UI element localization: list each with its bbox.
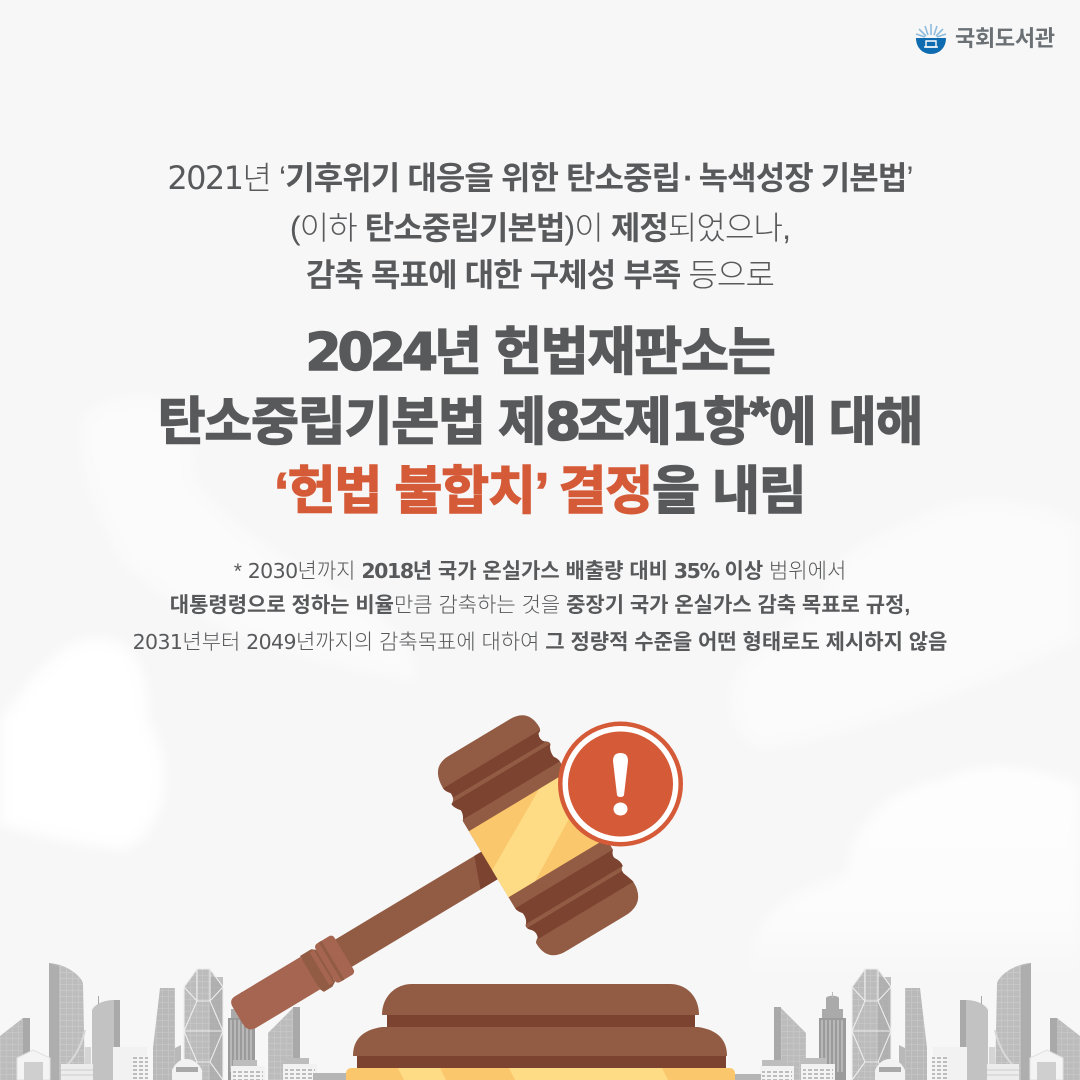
- head: [438, 715, 638, 956]
- logo: National Assembly Library: [916, 24, 1055, 54]
- gavel hammer: [231, 715, 682, 1030]
- logo wordmark: 국회도서관: [955, 26, 1055, 51]
- main heading: [158, 323, 922, 521]
- skyline right: [735, 963, 1080, 1080]
- main heading: 탄소중립기본법 제8조제1항*에 대해: [158, 387, 922, 453]
- footnote text block: 2031년부터 2049년까지의 감축목표에 대하여 그 정량적 수준을 어떤 형태로도 제시하지 않음: [133, 630, 947, 654]
- footnote text block: [133, 559, 947, 654]
- skyline left: [0, 963, 349, 1080]
- icon: open book with rays: [916, 24, 946, 54]
- intro text block: 2021년 ‘기후위기 대응을 위한 탄소중립 · 녹색성장 기본법’: [167, 159, 913, 197]
- icon: exclamation warning badge: [558, 722, 683, 846]
- intro text block: [167, 159, 913, 293]
- footnote text block: * 2030년까지 2018년 국가 온실가스 배출량 대비 35% 이상 범위에서: [234, 559, 846, 583]
- main heading: ‘헌법 불합치’ 결정을 내림: [274, 463, 806, 521]
- intro text block: 감축 목표에 대한 구체성 부족 등으로: [306, 257, 774, 293]
- gavel sound block: [346, 984, 735, 1080]
- main heading: 2024년 헌법재판소는: [305, 323, 775, 383]
- intro text block: (이하 탄소중립기본법)이 제정되었으나,: [290, 210, 790, 246]
- gavel illustration: [231, 715, 735, 1080]
- handle: [227, 846, 503, 1036]
- footnote text block: 대통령령으로 정하는 비율만큼 감축하는 것을 중장기 국가 온실가스 감축 목표로 규정,: [170, 594, 910, 617]
